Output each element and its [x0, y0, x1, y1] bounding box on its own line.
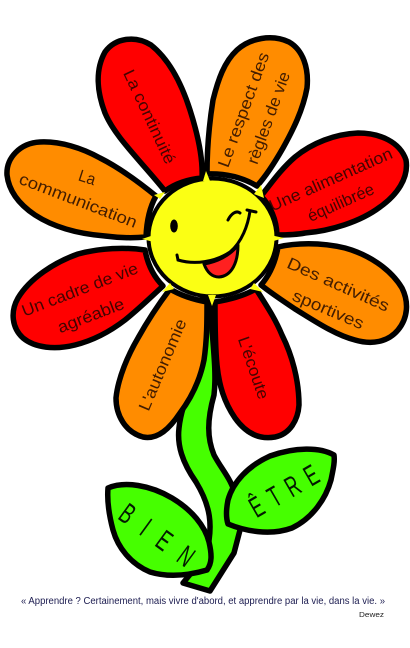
right leaf [226, 449, 334, 532]
stem [179, 300, 240, 591]
petal: Des activités sportives: Des activités [284, 254, 392, 316]
quotation: « Apprendre ? Certainement, mais vivre d'abord, et apprendre par la vie, dans la vie. » [21, 596, 386, 607]
open mouth [204, 245, 238, 277]
smile line [177, 210, 256, 262]
petal: La communication [7, 142, 156, 238]
petal: Le respect des règles de vie: Le respect des [215, 50, 273, 170]
petal: Un cadre de vie agréable [13, 248, 163, 348]
left leaf [108, 485, 211, 575]
petal: La communication: communication [16, 170, 140, 232]
petal: Le respect des règles de vie: règles de vie [244, 69, 294, 167]
petal: Une alimentation équilibrée: Une alimentation [267, 145, 395, 215]
left eye [170, 220, 178, 232]
petal: La continuité: La continuité [119, 67, 179, 167]
winking eye [228, 212, 240, 220]
centre spikes [142, 171, 284, 306]
petal: Une alimentation équilibrée [261, 133, 406, 235]
petal: Une alimentation équilibrée: équilibrée [305, 180, 377, 226]
petal: Des activités sportives [261, 244, 407, 342]
petal: L'autonomie [116, 289, 207, 437]
petal: Un cadre de vie agréable: agréable [55, 295, 127, 337]
label: BIEN: BIEN [113, 498, 200, 574]
petal: L'écoute: L'écoute [234, 334, 272, 402]
petal: La continuité [98, 39, 202, 191]
petal: L'écoute [215, 289, 299, 438]
petal: L'autonomie: L'autonomie [136, 316, 190, 414]
petal: La communication: La [76, 167, 99, 189]
petal: Le respect des règles de vie [207, 38, 307, 186]
quotation author: Dewez [359, 610, 384, 619]
label: ÊTRE: ÊTRE [244, 459, 325, 525]
smiling flower centre [142, 171, 284, 306]
centre disc [148, 178, 276, 296]
petal: Des activités sportives: sportives [290, 287, 366, 333]
petal: Un cadre de vie agréable: Un cadre de vie [19, 260, 141, 320]
